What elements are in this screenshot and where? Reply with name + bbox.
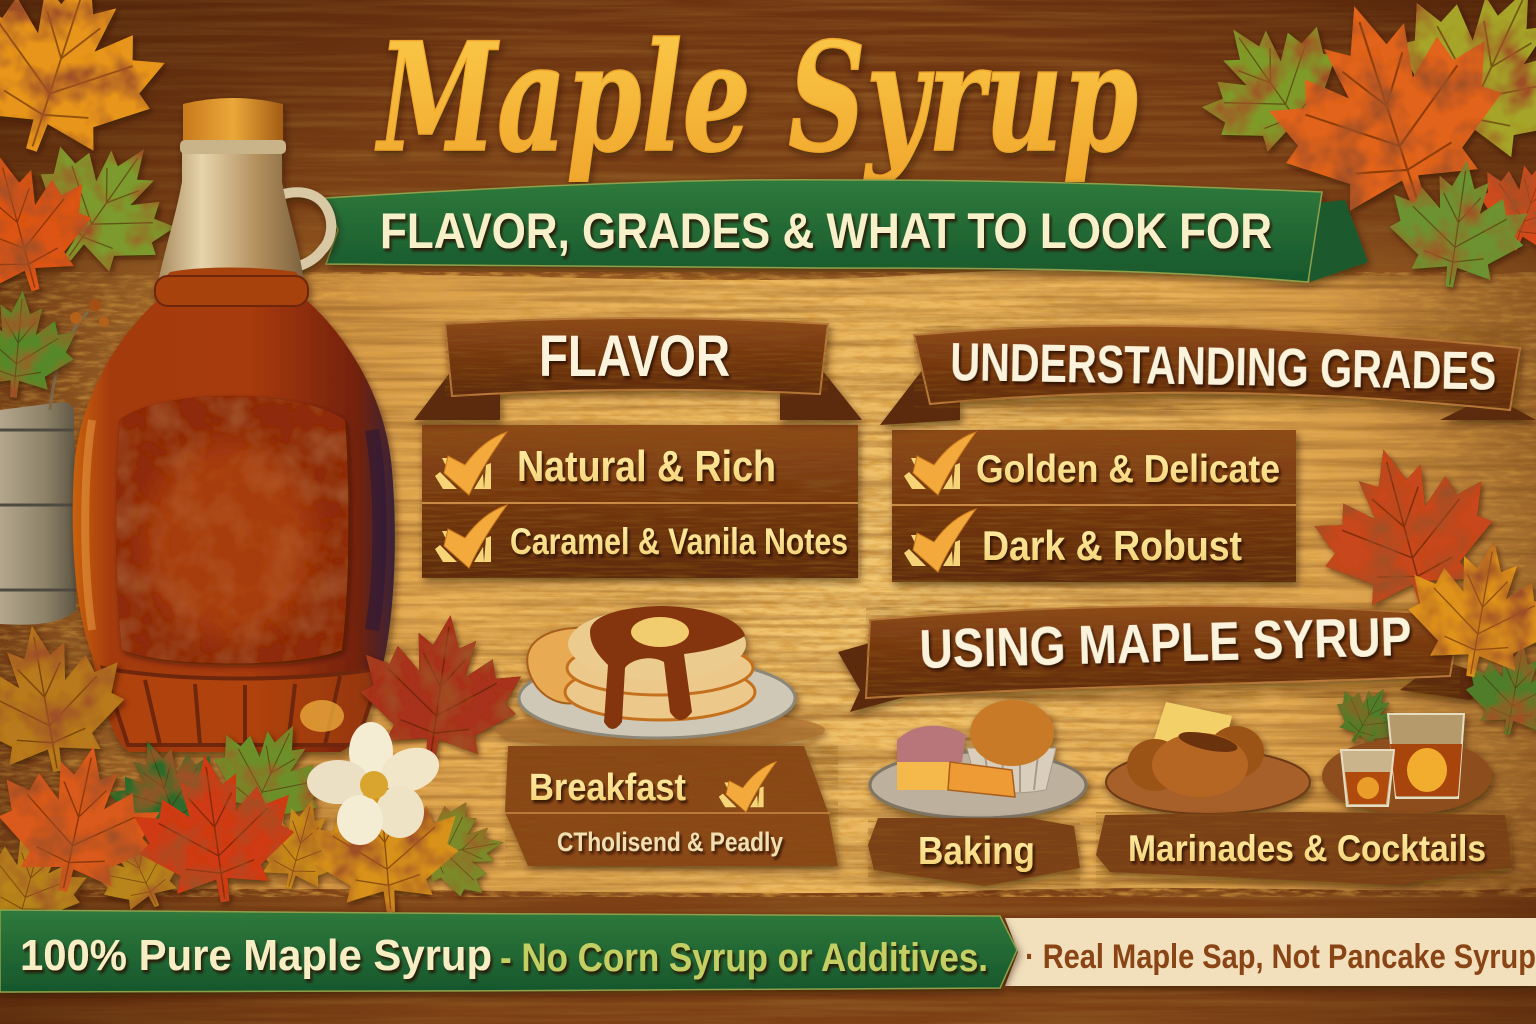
icon: pancake stack bbox=[495, 606, 825, 750]
icon: check natural bbox=[435, 432, 507, 495]
bottle handle bbox=[280, 192, 331, 270]
bottle neck bbox=[158, 152, 304, 282]
subtitle ribbon bbox=[325, 180, 1368, 282]
panel: baking label bbox=[868, 818, 1080, 886]
bottle body bbox=[73, 300, 395, 752]
icon: check dark bbox=[904, 509, 976, 572]
icon: cookies plate bbox=[1106, 702, 1310, 814]
icon: cocktail glasses bbox=[1322, 714, 1492, 814]
item: dark and robust: Dark & Robust bbox=[982, 522, 1242, 569]
icon: check golden bbox=[904, 432, 976, 495]
subtitle text: FLAVOR, GRADES & WHAT TO LOOK FOR bbox=[380, 203, 1272, 259]
icon: maple syrup bottle bbox=[73, 98, 395, 752]
heading banner: using maple syrup bbox=[838, 605, 1500, 712]
leaves: right side cluster bbox=[1300, 427, 1536, 758]
footer no additives text: - No Corn Syrup or Additives. bbox=[500, 936, 988, 980]
heading banner: understanding grades bbox=[880, 326, 1536, 425]
panel: marinades and cocktails label bbox=[1096, 812, 1512, 885]
bottle base cage bbox=[103, 668, 382, 745]
leaves: top left cluster bbox=[0, 0, 201, 402]
icon: metal sap bucket bbox=[0, 299, 109, 625]
icon: white flower bbox=[307, 722, 445, 845]
item: caramel and vanilla notes: Caramel & Vanila Notes bbox=[510, 521, 848, 562]
footer banner: green bbox=[0, 910, 1017, 992]
panel: understanding grades list bbox=[892, 430, 1296, 582]
breakfast text: Breakfast bbox=[529, 767, 686, 809]
title: Maple Syrup bbox=[374, 10, 1138, 186]
leaves: top right cluster bbox=[1176, 0, 1536, 296]
baking text: Baking bbox=[918, 830, 1035, 873]
breakfast subtext: CThoIisend & Peadly bbox=[557, 827, 783, 857]
icon: check caramel bbox=[435, 505, 507, 568]
item: golden and delicate: Golden & Delicate bbox=[976, 448, 1280, 491]
panel: breakfast label bbox=[505, 746, 838, 866]
footer banner: cream bbox=[1005, 918, 1536, 986]
using heading text: USING MAPLE SYRUP bbox=[919, 605, 1412, 680]
item: natural and rich: Natural & Rich bbox=[517, 442, 776, 491]
marinades and cocktails text: Marinades & Cocktails bbox=[1128, 828, 1486, 869]
plate bbox=[519, 658, 795, 738]
flavor heading text: FLAVOR bbox=[539, 324, 730, 389]
panel: flavor list bbox=[422, 425, 858, 578]
icon: baking plate bbox=[870, 700, 1086, 818]
bottle collar bbox=[155, 276, 308, 306]
heading banner: flavor bbox=[414, 318, 862, 420]
footer claim text: 100% Pure Maple Syrup bbox=[20, 931, 492, 980]
icon: check breakfast bbox=[719, 762, 776, 812]
bottle cap bbox=[183, 98, 283, 148]
leaves: bottom left cluster bbox=[0, 604, 528, 942]
syrup pool bbox=[590, 606, 745, 729]
